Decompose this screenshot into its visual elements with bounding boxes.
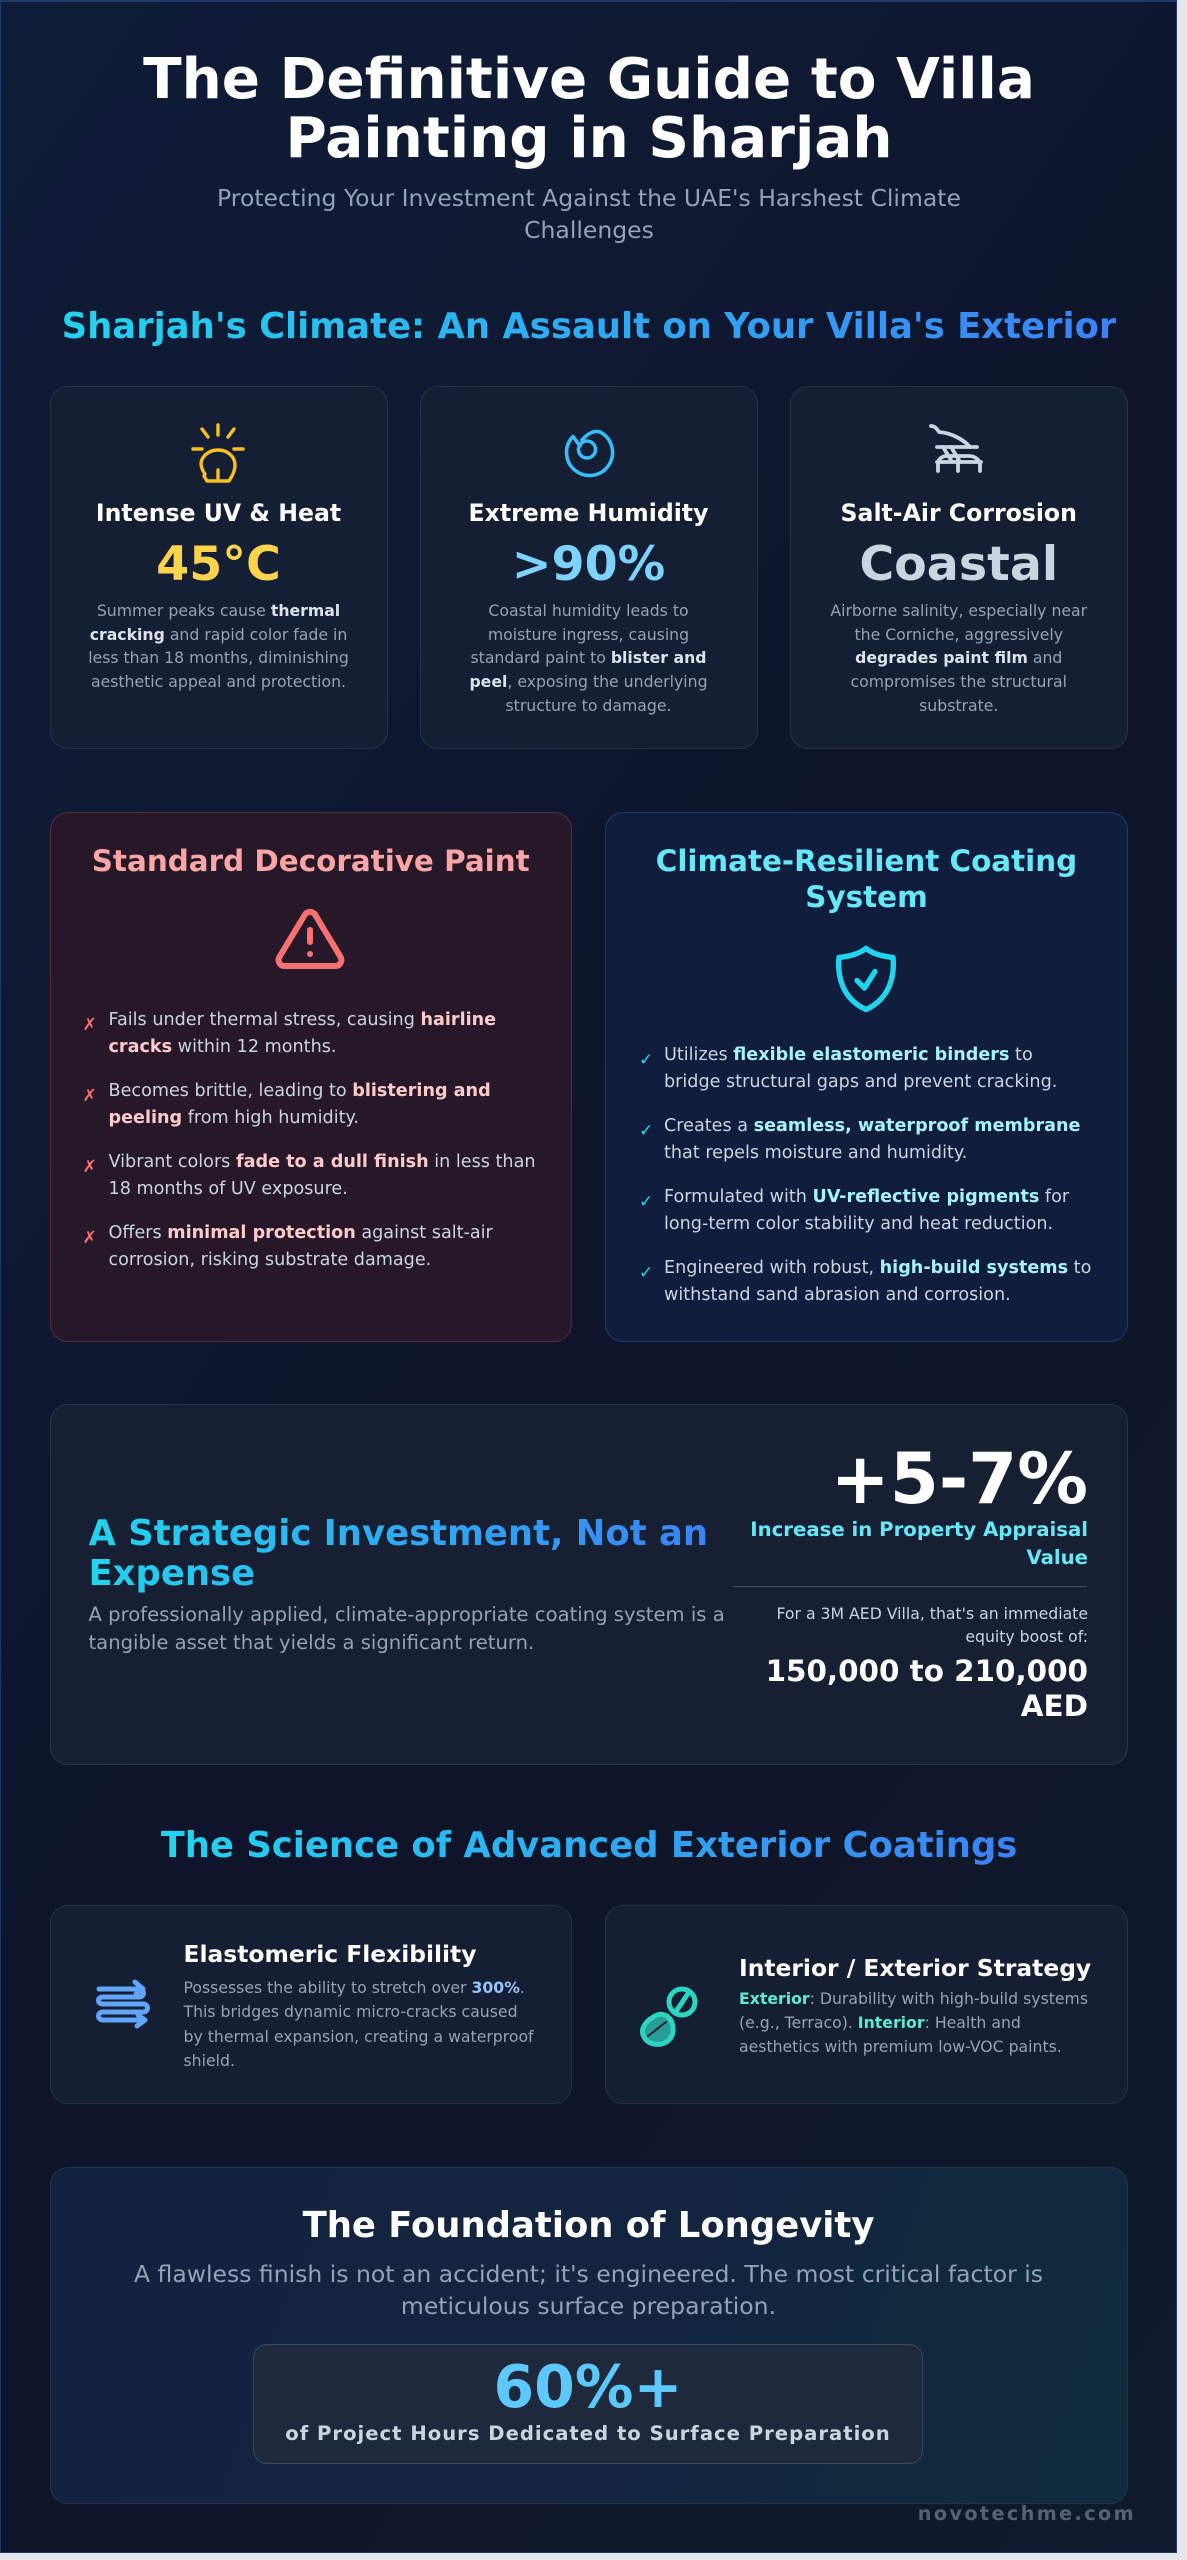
stat box <box>253 2344 923 2464</box>
list: failures: Becomes brittle, leading to blistering and <box>108 1080 491 1100</box>
list: failures: peeling from high humidity. <box>108 1108 359 1128</box>
equity text: equity boost of: <box>965 1627 1088 1646</box>
equity text <box>776 1604 1088 1646</box>
stat: appraisal increase: +5-7% <box>831 1437 1088 1520</box>
card text: by thermal expansion, creating a waterproof <box>184 2027 534 2046</box>
watermark: novotechme.com <box>918 2502 1136 2525</box>
investment heading: Expense <box>88 1552 255 1594</box>
list: failures: corrosion, risking substrate damage. <box>108 1250 431 1270</box>
investment text: tangible asset that yields a significant return. <box>88 1631 534 1654</box>
list: benefits: Creates a seamless, waterproof membrane <box>664 1116 1080 1136</box>
panel heading: Standard Decorative Paint <box>92 844 530 878</box>
card text <box>183 1978 534 2070</box>
list: benefits: long-term color stability and heat reduction. <box>664 1214 1053 1234</box>
foundation text: meticulous surface preparation. <box>401 2292 776 2320</box>
description: aesthetic appeal and protection. <box>91 672 346 691</box>
list: failures: Vibrant colors fade to a dull finish in less than <box>108 1152 536 1172</box>
list: benefits: Engineered with robust, high-build systems to <box>664 1258 1091 1278</box>
list: failures: ✗ <box>82 1228 97 1248</box>
stat: >90% <box>512 536 665 592</box>
description <box>88 601 349 691</box>
list: benefits: bridge structural gaps and prevent cracking. <box>664 1072 1057 1092</box>
item 3 <box>82 1152 536 1199</box>
card text: shield. <box>184 2051 235 2070</box>
description: substrate. <box>919 696 998 715</box>
card title: Salt-Air Corrosion <box>841 499 1077 527</box>
investment text <box>88 1603 725 1654</box>
list: benefits: ✓ <box>639 1192 653 1212</box>
stat label: of Project Hours Dedicated to Surface Preparation <box>285 2422 891 2444</box>
list: failures: Offers minimal protection against salt-air <box>108 1222 493 1242</box>
description: the Corniche, aggressively <box>854 625 1063 644</box>
investment heading: A Strategic Investment, Not an <box>88 1512 708 1554</box>
card text: Possesses the ability to stretch over 300%. <box>184 1978 525 1997</box>
panel: strategic investment <box>50 1404 1128 1765</box>
title: Painting in Sharjah <box>285 106 893 171</box>
description: degrades paint film and <box>855 648 1062 667</box>
description <box>469 601 708 715</box>
equity text: For a 3M AED Villa, that's an immediate <box>776 1604 1088 1623</box>
investment text: A professionally applied, climate-appropriate coating system is a <box>88 1603 725 1626</box>
item 2 <box>639 1116 1080 1163</box>
panel: extreme humidity <box>420 386 758 749</box>
list: failures: 18 months of UV exposure. <box>108 1179 348 1199</box>
panel: standard decorative paint <box>50 812 572 1342</box>
investment heading <box>88 1514 714 1594</box>
stat: project hours: 60%+ <box>493 2353 683 2421</box>
description <box>830 601 1088 715</box>
icon: sun <box>191 423 245 483</box>
description: moisture ingress, causing <box>488 625 689 644</box>
equity amount: 150,000 to 210,000 <box>766 1654 1088 1688</box>
card text: aesthetics with premium low-VOC paints. <box>739 2037 1062 2056</box>
panel: elastomeric flexibility <box>50 1905 572 2104</box>
item 4 <box>639 1258 1091 1305</box>
list: benefits: ✓ <box>639 1262 653 1282</box>
foundation heading: The Foundation of Longevity <box>303 2205 874 2246</box>
card text: This bridges dynamic micro-cracks caused <box>184 2002 518 2021</box>
card title: Intense UV & Heat <box>96 499 341 527</box>
item 1 <box>82 1010 496 1057</box>
equity amount: AED <box>1021 1688 1088 1722</box>
equity amount <box>766 1654 1088 1722</box>
card text: (e.g., Terraco). Interior: Health and <box>739 2013 1021 2032</box>
panel: salt-air corrosion <box>790 386 1128 749</box>
icon: droplet spiral <box>564 430 614 478</box>
item 2 <box>82 1080 491 1128</box>
card title: Extreme Humidity <box>469 499 708 527</box>
description: standard paint to blister and <box>470 648 706 667</box>
description: peel, exposing the underlying <box>469 672 708 691</box>
description: Airborne salinity, especially near <box>830 601 1087 620</box>
subtitle: Challenges <box>524 216 654 244</box>
icon: paint tools <box>640 1986 698 2047</box>
foundation text <box>134 2260 1043 2320</box>
foundation text: A flawless finish is not an accident; it's engineered. The most critical factor is <box>134 2260 1043 2288</box>
card title: Elastomeric Flexibility <box>184 1940 476 1968</box>
list: benefits: ✓ <box>639 1050 653 1070</box>
card text <box>739 1989 1088 2056</box>
heading: climate section: Sharjah's Climate: An Assault on Your Villa's Exterior <box>62 306 1116 347</box>
stat label: Increase in Property Appraisal <box>750 1518 1088 1541</box>
list: benefits: Formulated with UV-reflective pigments for <box>664 1186 1069 1206</box>
heading: science section: The Science of Advanced Exterior Coatings <box>161 1825 1017 1866</box>
list: benefits: that repels moisture and humidity. <box>664 1143 967 1163</box>
list: failures: ✗ <box>82 1014 97 1034</box>
description: Summer peaks cause thermal <box>97 601 340 620</box>
list: failures: ✗ <box>82 1156 97 1176</box>
description: compromises the structural <box>851 672 1067 691</box>
list: benefits: ✓ <box>639 1120 653 1140</box>
panel: intense UV and heat <box>50 386 388 749</box>
item 3 <box>639 1186 1070 1234</box>
panel heading: Climate-Resilient Coating <box>656 844 1077 878</box>
description: Coastal humidity leads to <box>488 601 689 620</box>
stat label <box>750 1518 1088 1569</box>
subtitle <box>217 184 961 244</box>
description: less than 18 months, diminishing <box>88 648 349 667</box>
list: benefits <box>639 1044 1091 1305</box>
panel heading: System <box>805 880 928 914</box>
title: The Definitive Guide to Villa <box>143 46 1035 112</box>
list: benefits: Utilizes flexible elastomeric binders to <box>664 1044 1033 1064</box>
description: cracking and rapid color fade in <box>90 625 347 644</box>
list: failures: cracks within 12 months. <box>108 1037 336 1057</box>
icon: shield check <box>836 946 896 1012</box>
stat: Coastal <box>859 536 1058 592</box>
panel: interior exterior strategy <box>605 1905 1128 2104</box>
description: structure to damage. <box>506 696 671 715</box>
card title: Interior / Exterior Strategy <box>739 1954 1091 1982</box>
list: failures: Fails under thermal stress, causing hairline <box>108 1010 496 1030</box>
subtitle: Protecting Your Investment Against the UAE's Harshest Climate <box>217 184 961 212</box>
divider <box>732 1586 1086 1587</box>
list: benefits: withstand sand abrasion and corrosion. <box>664 1285 1011 1305</box>
stat: 45°C <box>156 536 281 592</box>
item 4 <box>82 1222 493 1270</box>
card text: Exterior: Durability with high-build systems <box>739 1989 1088 2008</box>
panel heading <box>656 844 1077 914</box>
icon: stretch <box>96 1980 150 2028</box>
list: failures <box>82 1010 536 1270</box>
panel: foundation of longevity <box>50 2167 1128 2504</box>
list: failures: ✗ <box>82 1086 97 1106</box>
item 1 <box>639 1044 1057 1092</box>
icon: corrosion <box>929 424 983 473</box>
icon: warning triangle <box>276 908 344 969</box>
stat label: Value <box>1026 1546 1088 1569</box>
panel: climate-resilient coating system <box>605 812 1128 1342</box>
title <box>143 46 1035 171</box>
